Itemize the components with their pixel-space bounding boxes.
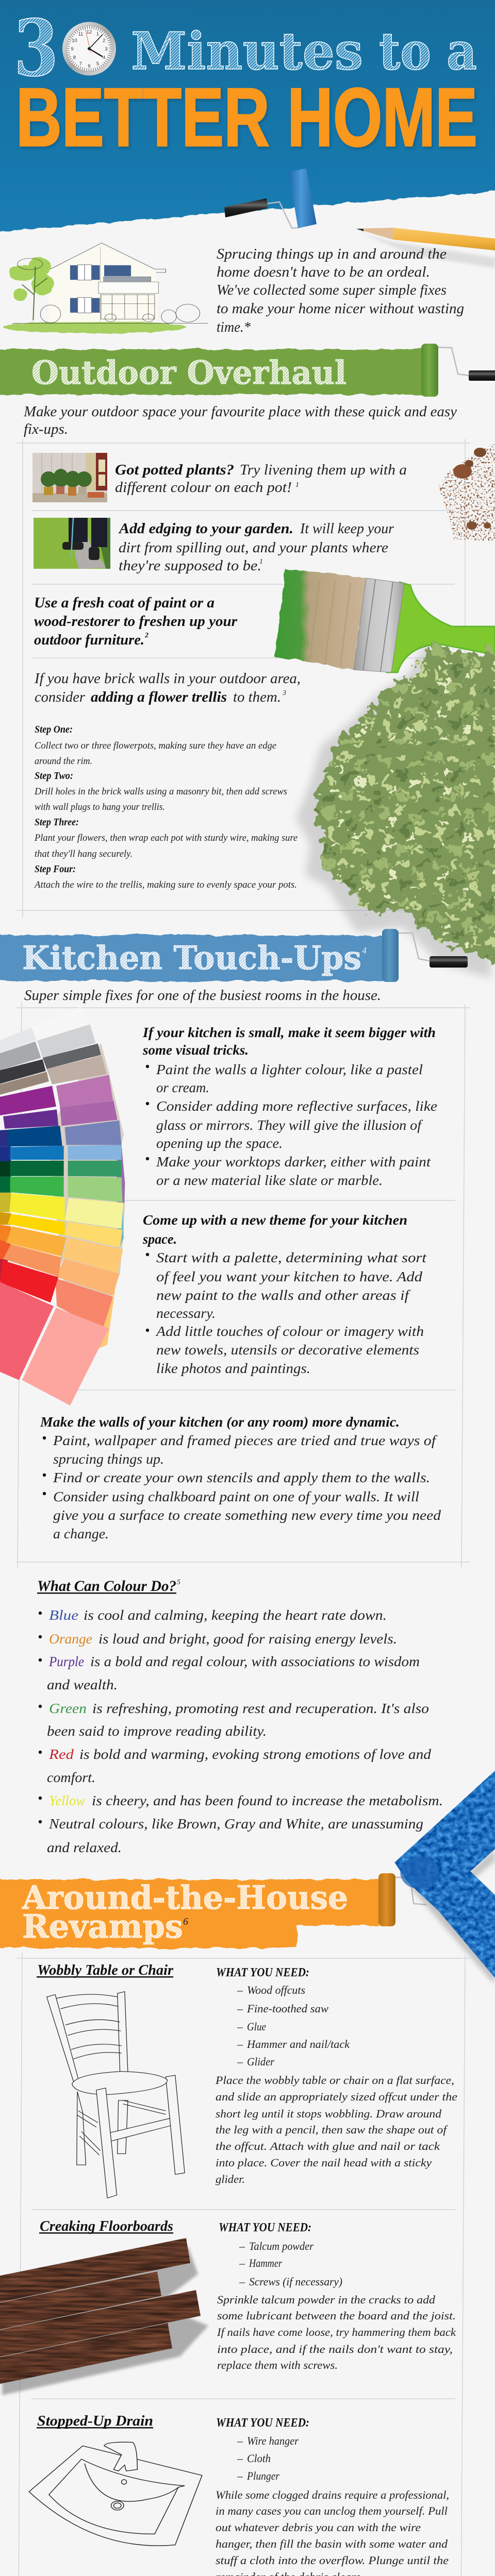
icon: clock as zero: 7	[79, 61, 82, 67]
tip: small kitchen: some visual tricks.	[142, 1042, 249, 1058]
list: what colours do: Orange	[49, 1631, 92, 1647]
needs and method: wobbly table: –	[237, 2055, 243, 2068]
kitchen intro: Super simple fixes for one of the busiest rooms in the house.	[24, 988, 381, 1004]
list: what colours do: been said to improve reading ability.	[47, 1723, 267, 1739]
illustration: house sketch	[3, 243, 208, 333]
needs and method: creaking floorboards: Sprinkle talcum powder in the cracks to add	[217, 2293, 436, 2306]
tip: small kitchen: If your kitchen is small, make it seem bigger with	[142, 1025, 436, 1040]
icon: clock as zero	[62, 22, 116, 75]
needs and method: wobbly table: –	[237, 2002, 243, 2015]
needs and method: creaking floorboards: some lubricant between the board and the joist.	[217, 2309, 456, 2322]
needs and method: wobbly table: Glue	[247, 2020, 266, 2033]
list: what colours do: is cool and calming, keeping the heart rate down.	[84, 1607, 387, 1623]
heading: Around-the-House Revamps	[22, 1878, 348, 1945]
icon: clock as zero: 9	[71, 46, 74, 52]
panel: revamps frame	[16, 1953, 470, 2576]
needs and method: stopped-up drain: –	[237, 2452, 243, 2465]
tip: garden edging text: Add edging to your garden.	[118, 521, 293, 537]
icon: blue roller	[382, 929, 468, 982]
needs and method: wobbly table: short leg until it stops wobbling. Draw around	[216, 2107, 442, 2120]
heading: Kitchen Touch-Ups: Kitchen Touch-Ups	[22, 939, 361, 977]
needs and method: stopped-up drain: –	[237, 2469, 243, 2482]
icon: clock as zero: 6	[88, 63, 91, 69]
banner: Kitchen Touch-Ups	[0, 929, 468, 982]
banner: Around-the-House Revamps	[0, 1873, 426, 1948]
list: what colours do: Purple	[48, 1654, 84, 1669]
steps: trellis instructions	[34, 724, 298, 890]
tip: flower trellis text: adding a flower trellis	[91, 689, 227, 705]
tip: new theme: new paint to the walls and other areas if	[156, 1287, 411, 1303]
needs and method: wobbly table: and slide an appropriately sized offcut under the	[216, 2090, 457, 2103]
banner: Outdoor Overhaul	[0, 344, 495, 397]
photo: potted plants	[32, 453, 107, 502]
icon: clock as zero: 10	[72, 38, 77, 43]
footnote marker 6: 6	[183, 1916, 188, 1927]
title line: Minutes to a: to	[379, 22, 431, 81]
icon: clock as zero: 11	[78, 31, 83, 37]
needs and method: wobbly table: the offcut. Attach with glue and nail or tack	[216, 2140, 440, 2153]
icon: clock as zero: 3	[105, 46, 108, 52]
intro text: time.*	[217, 319, 251, 335]
icon: blue paint roller	[224, 168, 317, 228]
needs and method: wobbly table: –	[237, 1984, 243, 1996]
tip: dynamic walls: give you a surface to create something new every time you need	[53, 1507, 441, 1523]
heading: Creaking Floorboards: Creaking Floorboards	[40, 2218, 173, 2234]
tip: flower trellis text: to them.	[233, 689, 281, 705]
needs and method: creaking floorboards: Talcum powder	[249, 2240, 314, 2252]
tip: potted plants text: Try livening them up with a	[240, 462, 407, 478]
needs and method: wobbly table: –	[237, 2020, 243, 2033]
tip: dynamic walls	[40, 1414, 441, 1541]
tip: garden edging text: 1	[259, 558, 263, 566]
needs and method: creaking floorboards	[217, 2221, 456, 2371]
steps: trellis instructions: Step Three:	[35, 817, 79, 828]
title line: Minutes to a: Minutes	[131, 22, 363, 81]
needs and method: wobbly table: –	[237, 2038, 243, 2050]
needs and method: creaking floorboards: Hammer	[249, 2257, 282, 2269]
title line: Minutes to a	[131, 22, 477, 81]
image: scattered dirt	[438, 444, 495, 541]
needs and method: creaking floorboards: –	[239, 2275, 245, 2288]
needs and method: creaking floorboards: If nails have come loose, try hammering them back	[217, 2326, 456, 2338]
tip: potted plants text: 1	[295, 481, 299, 489]
steps: trellis instructions: Step Two:	[35, 770, 73, 782]
icon: pencil	[356, 228, 495, 268]
steps: trellis instructions: that they'll hang securely.	[35, 849, 133, 859]
intro text: to make your home nicer without wasting	[217, 300, 464, 317]
tip: small kitchen: Consider adding more reflective surfaces, like	[156, 1098, 437, 1114]
tip: new theme: necessary.	[156, 1306, 216, 1321]
title line: Minutes to a: a	[447, 22, 477, 81]
image: green paint brush	[275, 568, 495, 672]
image: wooden floorboards	[0, 2238, 208, 2395]
heading: Outdoor Overhaul: Outdoor Overhaul	[31, 353, 346, 392]
tip: new theme: space.	[142, 1231, 177, 1247]
tip: new theme: new towels, utensils or decorative elements	[156, 1342, 419, 1358]
steps: trellis instructions: Step Four:	[35, 863, 76, 875]
tip: dynamic walls: Consider using chalkboard paint on one of your walls. It will	[53, 1489, 419, 1504]
tip: new theme: Add little touches of colour or imagery with	[155, 1324, 424, 1339]
tip: dynamic walls: Make the walls of your kitchen (or any room) more dynamic.	[40, 1414, 400, 1430]
needs and method: wobbly table: the leg with a pencil, then saw the shape out of	[216, 2123, 448, 2136]
needs and method: stopped-up drain: hanger, then fill the basin with some water and	[216, 2537, 448, 2550]
needs and method: wobbly table	[215, 1966, 457, 2185]
tip: flower trellis text	[34, 671, 301, 705]
list: what colours do: is a bold and regal colour, with associations to wisdom	[90, 1654, 420, 1669]
tip: dynamic walls: a change.	[53, 1526, 109, 1541]
list: what colours do: and relaxed.	[47, 1840, 122, 1855]
needs and method: creaking floorboards: into place, and if the nails don't want to stay,	[217, 2343, 453, 2355]
outdoor section intro: Make your outdoor space your favourite place with these quick and easy	[23, 404, 457, 420]
tip: small kitchen: or a new material like slate or marble.	[156, 1173, 383, 1188]
needs and method: creaking floorboards: replace them with screws.	[217, 2359, 338, 2371]
steps: trellis instructions: Attach the wire to the trellis, making sure to evenly space your pots.	[34, 879, 297, 890]
tip: garden edging text: It will keep your	[300, 521, 394, 537]
tip: dynamic walls: sprucing things up.	[53, 1451, 164, 1467]
heading: What Can Colour Do?: What Can Colour Do?	[37, 1578, 176, 1595]
list: what colours do: Yellow	[49, 1793, 85, 1808]
list: what colours do: and wealth.	[47, 1677, 118, 1692]
intro text: Sprucing things up in and around the	[217, 246, 447, 262]
list: what colours do: Blue	[49, 1607, 78, 1623]
title digit 3: 3	[14, 3, 58, 94]
image: colour swatch fan	[0, 1007, 125, 1405]
icon: clock as zero: 5	[96, 61, 99, 67]
list: what colours do: Neutral colours, like Brown, Gray and White, are unassuming	[48, 1816, 423, 1832]
tip: flower trellis text: consider	[35, 689, 85, 705]
outdoor section intro: fix-ups.	[24, 421, 68, 437]
illustration: chair	[47, 1992, 185, 2198]
title: 30 Minutes to a Better Home	[14, 3, 477, 164]
tip: flower trellis text: 3	[282, 689, 286, 697]
tip: paint furniture text: 2	[144, 632, 148, 639]
tip: potted plants text: Got potted plants?	[115, 462, 234, 478]
steps: trellis instructions: Drill holes in the brick walls using a masonry bit, then add screws	[34, 786, 287, 797]
tip: paint furniture text: outdoor furniture.	[34, 632, 144, 648]
intro text: home doesn't have to be an ordeal.	[217, 264, 430, 280]
needs and method: stopped-up drain: stuff a cloth into the overflow. Plunge until the	[216, 2554, 449, 2567]
icon: green roller	[421, 344, 495, 397]
steps: trellis instructions: Step One:	[35, 724, 73, 735]
photo: garden edging	[34, 518, 110, 569]
tip: new theme: of feel you want your kitchen to have. Add	[156, 1269, 423, 1284]
tip: paint furniture text	[34, 595, 238, 648]
tip: paint furniture text: wood-restorer to freshen up your	[34, 614, 238, 630]
tip: small kitchen: or cream.	[156, 1080, 209, 1095]
tip: new theme: Start with a palette, determining what sort	[156, 1250, 427, 1265]
heading: What Can Colour Do?: 5	[177, 1579, 180, 1586]
tip: paint furniture text: Use a fresh coat of paint or a	[34, 595, 214, 611]
needs and method: wobbly table: Place the wobbly table or chair on a flat surface,	[215, 2074, 454, 2087]
heading: Wobbly Table or Chair: Wobbly Table or Chair	[37, 1962, 174, 1978]
needs and method: creaking floorboards: Screws (if necessary)	[249, 2275, 342, 2288]
needs and method: wobbly table: into place. Cover the nail head with a sticky	[216, 2156, 432, 2169]
image: leafy plant	[296, 644, 495, 978]
heading: Around-the-House Revamps: Around-the-House	[22, 1878, 348, 1917]
needs and method: stopped-up drain: Cloth	[247, 2452, 271, 2465]
tip: small kitchen: Paint the walls a lighter colour, like a pastel	[156, 1062, 423, 1077]
needs and method: stopped-up drain	[216, 2416, 449, 2576]
needs and method: creaking floorboards: –	[239, 2257, 245, 2269]
tip: new theme: like photos and paintings.	[156, 1361, 310, 1376]
icon: clock as zero: 8	[73, 55, 76, 61]
steps: trellis instructions: Collect two or three flowerpots, making sure they have an edge	[35, 740, 276, 751]
needs and method: stopped-up drain: Plunger	[246, 2469, 279, 2482]
list: what colours do: is bold and warming, evoking strong emotions of love and	[79, 1747, 432, 1762]
list: what colours do	[39, 1607, 443, 1855]
list: what colours do: Red	[48, 1747, 74, 1762]
image: blue ornate picture frame	[394, 1771, 495, 1982]
needs and method: stopped-up drain: out whatever debris you can with the wire	[216, 2521, 421, 2534]
steps: trellis instructions: around the rim.	[35, 756, 92, 767]
tip: garden edging text: dirt from spilling out, and your plants where	[119, 540, 388, 556]
footnote marker 4: 4	[362, 945, 367, 956]
needs and method: wobbly table: Glider	[247, 2055, 274, 2068]
icon: clock as zero: 2	[103, 38, 105, 43]
needs and method: wobbly table: Fine-toothed saw	[246, 2002, 328, 2015]
tip: garden edging text	[118, 521, 394, 574]
needs and method: stopped-up drain: in many cases you can unclog them yourself. Pull	[216, 2504, 448, 2517]
icon: orange roller	[378, 1873, 426, 1926]
tip: small kitchen: glass or mirrors. They will give the illusion of	[156, 1117, 423, 1133]
icon: clock as zero: 1	[96, 31, 99, 37]
tip: dynamic walls: Find or create your own stencils and apply them to the walls.	[53, 1470, 430, 1485]
tip: flower trellis text: If you have brick walls in your outdoor area,	[34, 671, 301, 687]
needs and method: creaking floorboards: –	[239, 2240, 245, 2252]
needs and method: stopped-up drain: Wire hanger	[247, 2434, 299, 2447]
illustration: sink	[29, 2442, 202, 2546]
list: what colours do: comfort.	[47, 1770, 95, 1785]
heading: Around-the-House Revamps: Revamps	[22, 1907, 183, 1945]
icon: clock as zero: 4	[103, 55, 105, 61]
outdoor section intro	[23, 404, 457, 437]
panel: outdoor frame	[16, 439, 470, 917]
tip: new theme	[142, 1212, 427, 1376]
heading: Stopped-Up Drain: Stopped-Up Drain	[37, 2413, 153, 2429]
tip: potted plants text	[115, 462, 407, 496]
list: what colours do: is refreshing, promoting rest and recuperation. It's also	[92, 1701, 429, 1716]
tip: dynamic walls: Paint, wallpaper and framed pieces are tried and true ways of	[53, 1433, 438, 1448]
tip: small kitchen	[142, 1025, 437, 1188]
intro text: We've collected some super simple fixes	[217, 282, 447, 298]
tip: small kitchen: opening up the space.	[156, 1136, 283, 1151]
needs and method: wobbly table: Wood offcuts	[247, 1984, 305, 1996]
needs and method: wobbly table: WHAT YOU NEED:	[216, 1966, 309, 1979]
panel: kitchen frame	[16, 1002, 470, 1569]
needs and method: stopped-up drain: –	[237, 2434, 243, 2447]
header: blue torn paint background	[0, 0, 495, 232]
list: what colours do: is loud and bright, good for raising energy levels.	[98, 1631, 397, 1647]
steps: trellis instructions: with wall plugs to hang your trellis.	[35, 802, 165, 812]
icon: clock as zero: 12	[87, 29, 92, 35]
tip: new theme: Come up with a new theme for your kitchen	[143, 1212, 407, 1228]
intro text	[217, 246, 464, 335]
needs and method: stopped-up drain: WHAT YOU NEED:	[216, 2416, 309, 2430]
list: what colours do: Green	[49, 1701, 87, 1716]
tip: small kitchen: Make your worktops darker, either with paint	[156, 1154, 432, 1170]
needs and method: creaking floorboards: WHAT YOU NEED:	[219, 2221, 311, 2234]
list: what colours do: is cheery, and has been found to increase the metabolism.	[92, 1793, 443, 1808]
needs and method: wobbly table: Hammer and nail/tack	[246, 2038, 350, 2050]
tip: garden edging text: they're supposed to be.	[119, 558, 261, 574]
steps: trellis instructions: Plant your flowers, then wrap each pot with sturdy wire, making sure	[34, 833, 298, 843]
needs and method: stopped-up drain: While some clogged drains require a professional,	[216, 2488, 449, 2501]
tip: potted plants text: different colour on each pot!	[115, 480, 292, 496]
needs and method: wobbly table: glider.	[216, 2173, 245, 2185]
